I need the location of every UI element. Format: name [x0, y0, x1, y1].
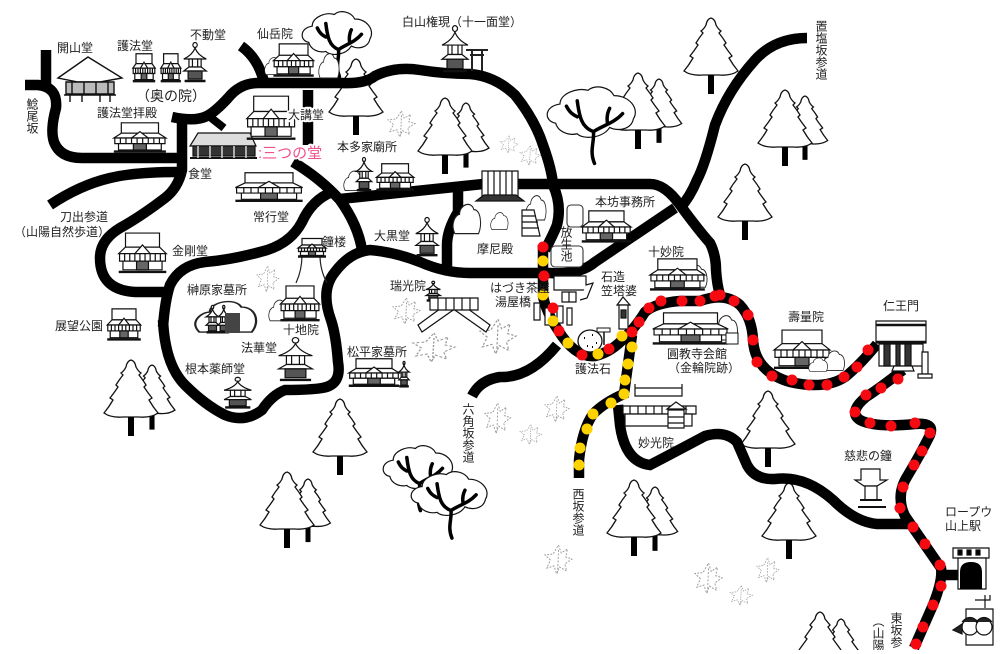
- place name labels: 慈悲の鐘: [844, 449, 892, 463]
- place name labels: 十妙院: [648, 245, 684, 259]
- place name labels: 常行堂: [253, 210, 289, 224]
- building: 鐘楼: [296, 238, 327, 283]
- place name labels: 法華堂: [241, 341, 277, 355]
- building: 仙岳院: [265, 44, 339, 78]
- vertical route labels: 鯰尾坂: [25, 98, 39, 134]
- place name labels: 笠塔婆: [601, 283, 637, 298]
- bell tower: 慈悲の鐘: [855, 469, 887, 507]
- building: 大講堂: [247, 96, 295, 139]
- building: はづき茶屋: [554, 276, 593, 302]
- building: 護法堂: [133, 42, 206, 81]
- ropeway car with children: [953, 595, 993, 645]
- ropeway station: [953, 548, 989, 589]
- trees: [104, 18, 859, 651]
- decorative maple leaves: [257, 111, 779, 605]
- place name labels: 松平家墓所: [347, 345, 407, 359]
- place name labels: 白山権現（十一面堂）: [402, 14, 522, 29]
- building: 摩尼殿: [453, 171, 546, 236]
- building: 法華堂: [279, 338, 312, 380]
- building: 大黒堂: [416, 217, 438, 255]
- place name labels: 根本薬師堂: [185, 362, 245, 376]
- building: 榊原家墓所: [195, 302, 256, 333]
- place name labels: はづき茶屋: [490, 281, 550, 295]
- place name labels: 開山堂: [57, 41, 93, 55]
- place name labels: 刀出参道: [60, 210, 108, 224]
- building: 壽量院: [774, 330, 845, 371]
- place name labels: 妙光院: [638, 436, 674, 450]
- place name labels: 護法堂拝殿: [97, 105, 157, 120]
- place name labels: 榊原家墓所: [187, 283, 247, 297]
- vertical route labels: 置塩坂参道: [814, 20, 828, 81]
- place name labels: 大黒堂: [374, 229, 410, 243]
- pond: 放生池: [551, 205, 583, 267]
- highlighted label: 三つの堂: :三つの堂: [258, 145, 322, 162]
- vertical route labels: 西坂参道: [571, 488, 585, 537]
- place name labels: [14, 14, 992, 533]
- place name labels: （奥の院）: [136, 88, 206, 104]
- building: 金剛堂: [119, 233, 166, 272]
- building: 食堂: [190, 133, 257, 158]
- building: 本多家廟所: [344, 157, 414, 190]
- bridge: 湯屋橋: [534, 303, 572, 325]
- place name labels: 圓教寺会館: [667, 346, 727, 361]
- place name labels: 山上駅: [945, 519, 981, 533]
- vertical route labels: 六角坂参道: [461, 403, 475, 464]
- building: 十妙院: [650, 259, 707, 289]
- place name labels: 本多家廟所: [337, 140, 397, 154]
- building: 開山堂: [58, 57, 122, 102]
- building: 妙光院: [623, 384, 696, 428]
- place name labels: 壽量院: [788, 309, 824, 324]
- place name labels: 摩尼殿: [477, 242, 513, 256]
- place name labels: 十地院: [283, 323, 319, 337]
- place name labels: （山陽自然歩道）: [14, 224, 110, 239]
- place name labels: （金輪院跡）: [668, 360, 740, 375]
- place name labels: 不動堂: [190, 28, 226, 42]
- building: 瑞光院: [418, 281, 490, 332]
- place name labels: 食堂: [188, 167, 212, 181]
- vertical route labels: （山陽: [871, 615, 885, 652]
- place name labels: 湯屋橋: [495, 295, 531, 309]
- building: 本坊事務所: [582, 211, 631, 241]
- place name labels: ロープウ: [945, 505, 992, 519]
- place name labels: 瑞光院: [390, 279, 426, 293]
- vertical route labels: 東坂参: [889, 612, 903, 649]
- place name labels: 護法堂: [117, 38, 153, 53]
- place name labels: 展望公園: [55, 319, 103, 333]
- place name labels: 仙岳院: [257, 27, 293, 41]
- building: 松平家墓所: [349, 359, 409, 386]
- building: 展望公園: [107, 309, 141, 339]
- place name labels: 本坊事務所: [595, 194, 655, 209]
- building: 常行堂: [235, 173, 303, 201]
- place name labels: 大講堂: [288, 108, 324, 122]
- place name labels: 仁王門: [883, 299, 919, 313]
- place name labels: 鐘楼: [322, 234, 346, 249]
- building: 根本薬師堂: [224, 377, 251, 407]
- building: 護法堂拝殿: [114, 123, 166, 152]
- place name labels: 護法石: [575, 361, 611, 376]
- monument: 石造笠塔婆: [617, 297, 630, 329]
- building: 圓教寺会館: [653, 313, 738, 344]
- building: 白山権現: [442, 26, 488, 71]
- route dots: yellow: [538, 256, 638, 470]
- vertical route labels: 放生池: [559, 225, 573, 262]
- place name labels: 石造: [601, 270, 625, 284]
- deciduous trees: [302, 12, 635, 538]
- rock: 護法石: [578, 328, 610, 352]
- building: 十地院: [269, 286, 320, 321]
- place name labels: 金剛堂: [172, 244, 208, 258]
- gate: 仁王門: [876, 321, 932, 378]
- route dots: red: [538, 242, 946, 650]
